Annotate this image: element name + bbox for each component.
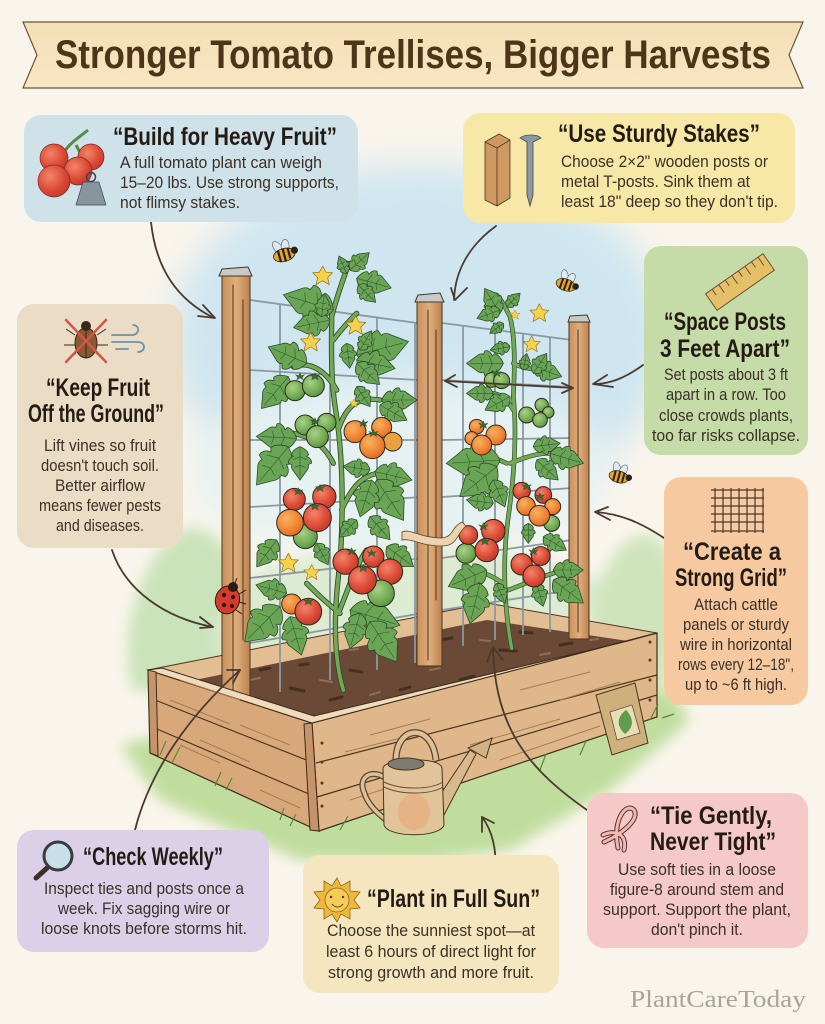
arrow: full sun	[482, 817, 495, 870]
heading	[660, 308, 790, 363]
heading: “Tie Gently,	[650, 802, 772, 830]
body text	[41, 879, 247, 938]
body text: support. Support the plant,	[603, 900, 791, 919]
icon: crossed-out beetle	[64, 320, 108, 362]
body text	[326, 921, 536, 982]
heading: Off the Ground”	[28, 400, 164, 428]
icon: ribbon tie	[603, 808, 635, 850]
heading	[675, 538, 787, 592]
body text: too far risks collapse.	[652, 426, 800, 445]
body text: apart in a row. Too	[666, 385, 786, 404]
heading: “Check Weekly”	[83, 843, 223, 871]
body text: panels or sturdy	[683, 615, 789, 634]
trellis posts	[219, 267, 590, 696]
body text: doesn't touch soil.	[41, 456, 159, 475]
body text: and diseases.	[56, 516, 144, 535]
body text: A full tomato plant can weigh	[120, 153, 322, 172]
body text: Better airflow	[55, 476, 146, 495]
body text: figure-8 around stem and	[610, 880, 784, 899]
body text: Inspect ties and posts once a	[44, 879, 244, 898]
icon: ladybug	[212, 578, 246, 617]
body text: rows every 12–18",	[678, 655, 794, 674]
heading: “Plant in Full Sun”	[367, 885, 540, 913]
panel: use sturdy stakes	[463, 113, 795, 223]
body text: 15–20 lbs. Use strong supports,	[120, 173, 339, 192]
arrow: grid	[595, 507, 664, 538]
flowers	[278, 266, 549, 580]
body text: close crowds plants,	[659, 406, 793, 425]
panel: tie gently	[587, 793, 808, 948]
trellis wire grid	[250, 300, 573, 692]
body text: metal T-posts. Sink them at	[561, 172, 750, 191]
watermark: PlantCareToday: PlantCareToday	[630, 987, 806, 1013]
panel: create a strong grid	[664, 477, 808, 705]
body text: Choose 2×2" wooden posts or	[561, 152, 768, 171]
icon: magnifying glass	[36, 842, 72, 878]
body text	[678, 595, 794, 694]
panel: build for heavy fruit	[24, 115, 358, 222]
panel: check weekly	[17, 830, 269, 952]
plant right	[443, 283, 591, 648]
body text: don't pinch it.	[651, 920, 743, 939]
body text	[561, 152, 778, 211]
body text: Use soft ties in a loose	[618, 860, 776, 879]
body text	[603, 860, 791, 939]
tomato plants	[233, 246, 591, 690]
body text: least 18" deep so they don't tip.	[561, 192, 778, 211]
panel: keep fruit off the ground	[17, 304, 183, 548]
icon: bees	[269, 235, 635, 486]
arrow: keep fruit off ground	[112, 550, 213, 628]
arrow: spacing to right post	[593, 365, 643, 387]
panel: plant in full sun	[303, 855, 559, 993]
icon: seed bag	[596, 683, 648, 755]
heading: “Keep Fruit	[46, 374, 151, 402]
body text	[39, 436, 161, 535]
heading: “Build for Heavy Fruit”	[113, 123, 337, 151]
title banner	[23, 22, 803, 88]
tomatoes	[277, 373, 561, 625]
icon: ruler	[706, 254, 774, 310]
icon: post and nail	[485, 134, 541, 206]
raised bed back and soil	[148, 603, 657, 723]
arrow: sturdy stakes to middle post	[451, 226, 496, 300]
icon: tomatoes and weight	[38, 130, 106, 205]
heading	[28, 374, 164, 428]
body text: Set posts about 3 ft	[664, 365, 788, 384]
icon: wire grid	[711, 488, 764, 533]
icon: wind	[112, 325, 144, 352]
plant left	[233, 246, 420, 690]
body text: week. Fix sagging wire or	[57, 899, 230, 918]
raised bed front	[148, 633, 674, 831]
heading: Never Tight”	[650, 828, 776, 856]
body text: up to ~6 ft high.	[685, 675, 787, 694]
body text: not flimsy stakes.	[120, 193, 240, 212]
heading: Strong Grid”	[675, 564, 787, 592]
body text: least 6 hours of direct light for	[326, 942, 536, 961]
body text	[120, 153, 339, 212]
double arrow: post spacing	[445, 375, 573, 393]
panel: space posts	[644, 246, 808, 455]
body text: wire in horizontal	[679, 635, 792, 654]
body text: Lift vines so fruit	[44, 436, 156, 455]
arrow: check weekly	[135, 670, 240, 830]
heading	[650, 802, 776, 856]
calyxes	[294, 369, 545, 605]
body text	[652, 365, 800, 445]
arrow: tie gently	[487, 647, 587, 810]
watercolor scene backdrop	[120, 165, 690, 862]
heading: “Create a	[683, 538, 782, 566]
icon: watering can	[362, 733, 492, 835]
heading: 3 Feet Apart”	[660, 335, 790, 363]
heading: “Use Sturdy Stakes”	[558, 120, 760, 148]
body text: loose knots before storms hit.	[41, 919, 247, 938]
arrow: heavy fruit to post	[151, 222, 215, 318]
body text: means fewer pests	[39, 496, 161, 515]
heading: “Space Posts	[664, 308, 786, 336]
icon: sun	[314, 878, 360, 922]
body text: Attach cattle	[694, 595, 778, 614]
body text: strong growth and more fruit.	[328, 963, 534, 982]
soft tie on middle post	[402, 522, 466, 546]
body text: Choose the sunniest spot—at	[327, 921, 535, 940]
